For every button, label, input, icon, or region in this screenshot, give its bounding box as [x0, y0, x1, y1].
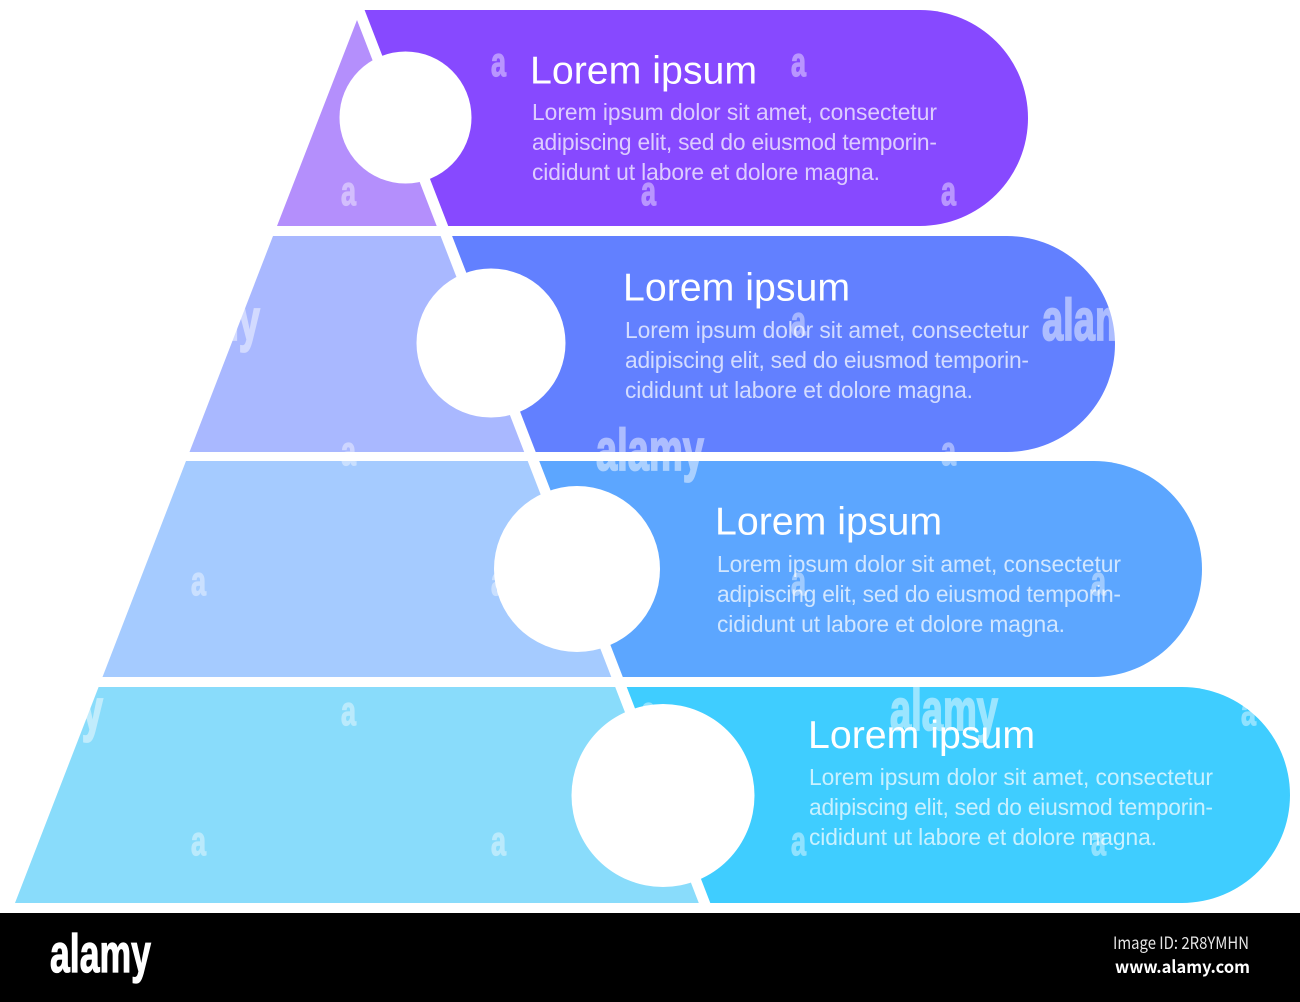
- pyramid segment 2: [190, 236, 524, 452]
- watermarks: [0, 39, 1257, 864]
- heading 1: Lorem ipsum: [530, 48, 757, 92]
- level 1: purple: [277, 10, 1028, 226]
- watermarks: a: [191, 818, 207, 864]
- watermarks: a: [941, 428, 957, 474]
- watermarks: a: [491, 39, 507, 85]
- watermarks: a: [791, 818, 807, 864]
- body 3: cididunt ut labore et dolore magna.: [717, 611, 1065, 637]
- body 3: Lorem ipsum dolor sit amet, consectetur: [717, 551, 1121, 577]
- text block 1: [530, 48, 937, 185]
- body 1: [532, 99, 937, 185]
- body 4: [809, 764, 1213, 850]
- watermarks: a: [491, 818, 507, 864]
- text block 4: [808, 713, 1213, 850]
- footer logo: alamy: [50, 924, 151, 984]
- watermarks: alamy: [152, 288, 260, 353]
- pill 3: [539, 461, 1202, 677]
- body 2: Lorem ipsum dolor sit amet, consectetur: [625, 317, 1029, 343]
- level 4: cyan: [15, 687, 1290, 903]
- heading 4: Lorem ipsum: [808, 713, 1035, 757]
- pill 2: [452, 236, 1115, 452]
- body 3: adipiscing elit, sed do eiusmod temporin-: [717, 581, 1121, 607]
- body 1: adipiscing elit, sed do eiusmod temporin-: [532, 129, 937, 155]
- watermarks: alamy: [890, 678, 998, 743]
- watermarks: alamy: [596, 418, 704, 483]
- body 3: [717, 551, 1121, 637]
- body 4: Lorem ipsum dolor sit amet, consectetur: [809, 764, 1213, 790]
- watermarks: a: [341, 168, 357, 214]
- level 3: blue: [102, 461, 1202, 677]
- watermarks: a: [1241, 688, 1257, 734]
- watermarks: a: [341, 688, 357, 734]
- watermarks: a: [1091, 558, 1107, 604]
- watermarks: a: [191, 558, 207, 604]
- watermarks: a: [941, 168, 957, 214]
- circle 4: [572, 704, 754, 887]
- heading 2: Lorem ipsum: [623, 266, 850, 310]
- pill 1: [365, 10, 1028, 226]
- text block 3: [715, 500, 1121, 637]
- pyramid segment 4: [15, 687, 699, 903]
- watermarks: a: [791, 298, 807, 344]
- pill 4: [627, 687, 1290, 903]
- website: www.alamy.com: [1115, 953, 1250, 978]
- white node circles: [340, 52, 754, 887]
- body 1: cididunt ut labore et dolore magna.: [532, 159, 880, 185]
- watermarks: a: [641, 168, 657, 214]
- watermarks: a: [1091, 818, 1107, 864]
- image id: Image ID: 2R8YMHN: [1113, 929, 1249, 954]
- watermarks: a: [491, 558, 507, 604]
- watermarks: a: [641, 688, 657, 734]
- watermarks: a: [791, 39, 807, 85]
- watermarks: alamy: [1042, 288, 1150, 353]
- watermarks: a: [341, 428, 357, 474]
- body 4: cididunt ut labore et dolore magna.: [809, 824, 1157, 850]
- circle 3: [494, 486, 660, 652]
- body 1: Lorem ipsum dolor sit amet, consectetur: [532, 99, 937, 125]
- level 2: indigo: [190, 236, 1115, 452]
- footer bar: [0, 913, 1300, 1002]
- body 4: adipiscing elit, sed do eiusmod temporin-: [809, 794, 1213, 820]
- text block 2: [623, 266, 1029, 403]
- body 2: adipiscing elit, sed do eiusmod temporin-: [625, 347, 1029, 373]
- pyramid segment 1: [277, 20, 437, 226]
- body 2: [625, 317, 1029, 403]
- watermarks: a: [791, 558, 807, 604]
- body 2: cididunt ut labore et dolore magna.: [625, 377, 973, 403]
- pyramid segment 3: [102, 461, 611, 677]
- circle 1: [340, 52, 472, 184]
- heading 3: Lorem ipsum: [715, 500, 942, 544]
- circle 2: [416, 268, 566, 418]
